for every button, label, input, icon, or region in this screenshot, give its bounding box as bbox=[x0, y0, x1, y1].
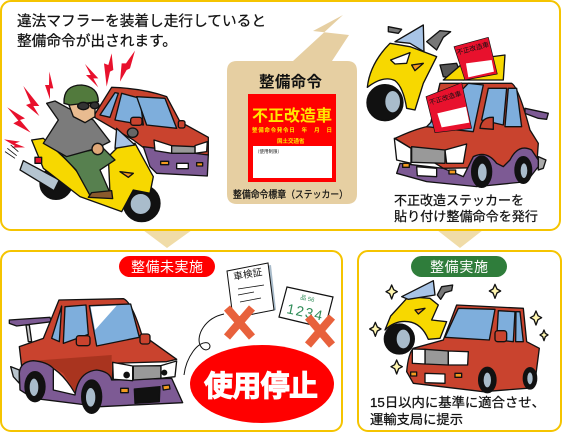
wheels bbox=[25, 372, 45, 402]
badge: not serviced: 整備未実施 bbox=[131, 259, 203, 275]
speech bubble: maintenance order bbox=[227, 15, 357, 204]
bumper details bbox=[134, 387, 160, 403]
sticker on car bbox=[426, 83, 472, 133]
icon: cross on certificate bbox=[227, 308, 252, 337]
headlights and grille bbox=[133, 366, 161, 380]
sticker caption text: 貼り付け整備命令を発行 bbox=[394, 209, 538, 224]
curved connector line bbox=[184, 314, 224, 375]
mirrors bbox=[76, 336, 90, 346]
illustration: tuned car, bottom left bbox=[9, 299, 183, 413]
arrow: right down bbox=[437, 230, 483, 248]
sticker: 国土交通省 bbox=[277, 137, 305, 145]
sticker on motorcycle: 不正改造車 bbox=[455, 40, 490, 57]
sticker: 不正改造車 bbox=[252, 107, 332, 125]
car bbox=[407, 305, 539, 393]
icon: vehicle inspection certificate bbox=[227, 263, 276, 318]
heading text: 違法マフラーを装着し走行していると bbox=[17, 13, 266, 30]
icon: vehicle inspection certificate: 車検証 bbox=[232, 266, 264, 283]
heading text bbox=[17, 13, 266, 50]
motorcycle bbox=[367, 25, 505, 121]
sticker: （使用制限） bbox=[255, 148, 282, 155]
sticker bbox=[248, 94, 336, 182]
scooter bbox=[384, 281, 453, 354]
bubble heading: 整備命令 bbox=[259, 73, 322, 91]
illustration: scooter rider and car bbox=[4, 51, 208, 222]
icon: number plate bbox=[279, 287, 333, 328]
illustration: tuned car and motorcycle with stickers bbox=[367, 25, 548, 187]
scooter bbox=[20, 128, 160, 222]
windows bbox=[89, 304, 139, 346]
wing bbox=[9, 317, 52, 326]
panel: serviced bbox=[358, 251, 561, 431]
sparkles bbox=[370, 284, 548, 374]
compliance text: 運輸支局に提示 bbox=[370, 412, 463, 427]
compliance text: 15日以内に基準に適合させ、 bbox=[370, 395, 545, 410]
compliance text bbox=[370, 395, 545, 427]
sticker caption: 整備命令標章（ステッカー） bbox=[233, 188, 348, 201]
panel: not serviced bbox=[1, 251, 342, 431]
sticker caption text bbox=[394, 193, 538, 224]
rider bbox=[43, 85, 115, 199]
icon: cross on plate bbox=[308, 317, 332, 345]
icon: number plate: 1234 bbox=[285, 300, 324, 323]
badge: serviced bbox=[411, 256, 507, 277]
sticker on car: 不正改造車 bbox=[428, 88, 463, 107]
illustration: legal car and scooter bbox=[370, 281, 548, 393]
callout: suspension of use: 使用停止 bbox=[204, 370, 318, 403]
lower body shade bbox=[22, 355, 112, 392]
bubble shape bbox=[227, 15, 357, 204]
arrow: left down bbox=[143, 230, 192, 248]
icon: number plate: 品 56 bbox=[300, 294, 316, 304]
panel: violation bbox=[1, 1, 560, 230]
callout: suspension of use bbox=[190, 345, 334, 423]
sticker: 整備命令発令日 年 月 日 bbox=[252, 126, 332, 134]
tuned car bbox=[394, 83, 548, 187]
badge: serviced: 整備実施 bbox=[430, 259, 488, 275]
sticker on motorcycle bbox=[454, 37, 497, 80]
car body bbox=[19, 299, 177, 393]
noise lightning bolts bbox=[4, 51, 135, 148]
skirt bbox=[19, 361, 183, 407]
car behind bbox=[93, 87, 208, 176]
heading text: 整備命令が出されます。 bbox=[17, 33, 177, 50]
badge: not serviced bbox=[119, 256, 215, 277]
sticker caption text: 不正改造ステッカーを bbox=[394, 193, 524, 208]
motion lines bbox=[5, 145, 18, 158]
